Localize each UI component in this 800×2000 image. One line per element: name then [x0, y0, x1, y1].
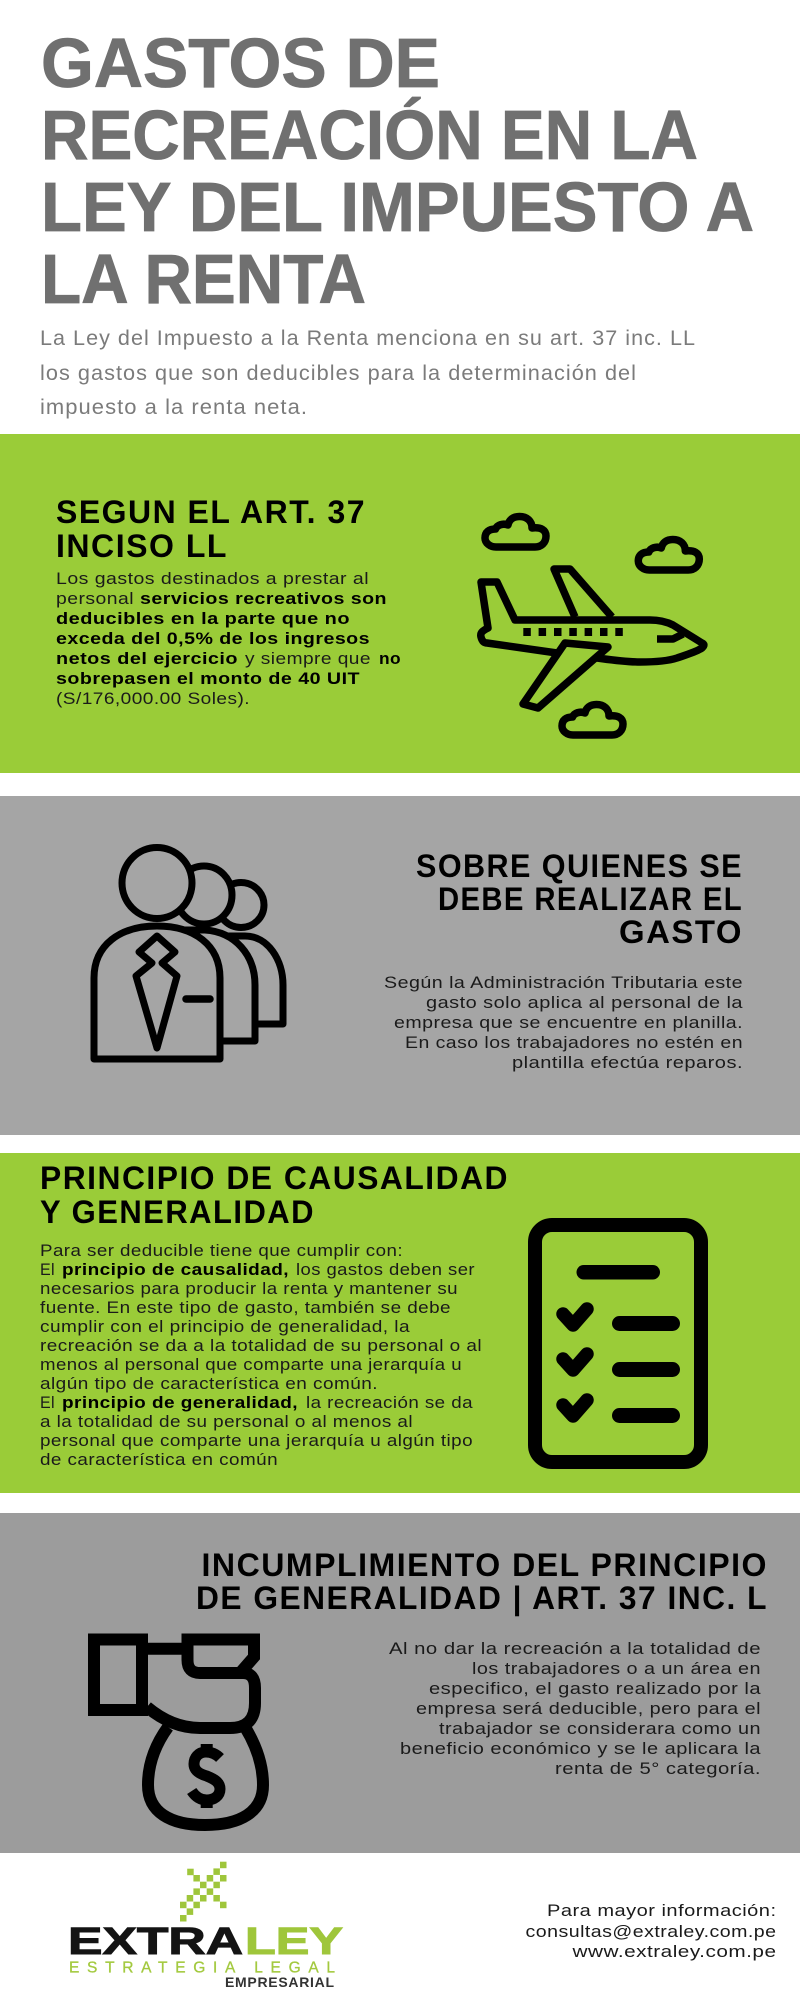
icon: three people in suits	[94, 848, 283, 1059]
title: RECREACIÓN EN LA	[41, 96, 698, 174]
logo mark: pixel X	[180, 1862, 226, 1922]
heading: segun el art. 37: INCISO LL	[56, 528, 228, 564]
heading: segun el art. 37: SEGUN EL ART. 37	[56, 494, 366, 530]
body text: incumplimiento	[389, 1639, 761, 1778]
body text: principio de causalidad: personal que comparte una jerarquía u algún tipo	[40, 1431, 473, 1450]
icon: airplane and clouds	[481, 516, 704, 735]
panel: principio de causalidad	[0, 1153, 800, 1493]
heading: principio de causalidad: Y GENERALIDAD	[40, 1194, 315, 1230]
body text: segun el art. 37	[56, 569, 401, 708]
body text: principio de causalidad: de característica en común	[40, 1450, 278, 1469]
heading: incumplimiento: DE GENERALIDAD | ART. 37 INC. L	[196, 1580, 768, 1616]
intro text: los gastos que son deducibles para la determinación del	[40, 362, 637, 385]
body text: segun el art. 37: (S/176,000.00 Soles).	[56, 689, 250, 708]
heading: sobre quienes: SOBRE QUIENES SE	[416, 848, 743, 884]
heading: segun el art. 37	[56, 494, 366, 564]
body text: segun el art. 37: personal	[56, 589, 134, 608]
body text: segun el art. 37: y siempre que	[245, 649, 371, 668]
heading: sobre quienes: GASTO	[619, 914, 743, 950]
intro text: La Ley del Impuesto a la Renta menciona en su art. 37 inc. LL	[40, 327, 696, 350]
body text: segun el art. 37: deducibles en la parte que no	[56, 609, 350, 628]
body text: principio de causalidad: Para ser deducible tiene que cumplir con:	[40, 1241, 403, 1260]
body text: segun el art. 37: netos del ejercicio	[56, 649, 238, 668]
title: LA RENTA	[41, 240, 366, 318]
body text: principio de causalidad: a la totalidad de su personal o al menos al	[40, 1412, 413, 1431]
body text: principio de causalidad: la recreación se da	[306, 1393, 473, 1412]
contact text: www.extraley.com.pe	[571, 1942, 776, 1961]
intro text: impuesto a la renta neta.	[40, 396, 308, 419]
title: GASTOS DE	[41, 24, 440, 102]
title	[41, 24, 754, 318]
contact text: consultas@extraley.com.pe	[526, 1922, 776, 1941]
body text: segun el art. 37: no	[379, 649, 401, 668]
title: LEY DEL IMPUESTO A	[41, 168, 754, 246]
intro text	[40, 327, 696, 419]
body text: incumplimiento: trabajador se considerara como un	[439, 1719, 761, 1738]
heading: sobre quienes	[416, 848, 743, 950]
icon: hand holding money bag	[94, 1640, 263, 1825]
body text: segun el art. 37: sobrepasen el monto de 40 UIT	[56, 669, 360, 688]
body text: principio de causalidad: principio de causalidad,	[62, 1260, 289, 1279]
heading: sobre quienes: DEBE REALIZAR EL	[438, 881, 743, 917]
body text: segun el art. 37: exceda del 0,5% de los ingresos	[56, 629, 370, 648]
body text: principio de causalidad: los gastos deben ser	[296, 1260, 475, 1279]
body text: principio de causalidad: fuente. En este tipo de gasto, también se debe	[40, 1298, 451, 1317]
logo: extraley: EXTRA	[68, 1921, 243, 1963]
body text: principio de causalidad: menos al personal que comparte una jerarquía u	[40, 1355, 462, 1374]
body text: segun el art. 37: Los gastos destinados a prestar al	[56, 569, 369, 588]
body text: segun el art. 37: servicios recreativos son	[140, 589, 387, 608]
body text: principio de causalidad: El	[40, 1393, 55, 1412]
panel: sobre quienes	[0, 796, 800, 1135]
body text: principio de causalidad: necesarios para producir la renta y mantener su	[40, 1279, 458, 1298]
contact text: Para mayor información:	[547, 1901, 776, 1920]
body text: principio de causalidad	[40, 1241, 482, 1469]
body text: sobre quienes: Según la Administración Tributaria este	[384, 973, 743, 992]
body text: sobre quienes	[384, 973, 743, 1072]
panel: segun el art. 37	[0, 434, 800, 773]
body text: incumplimiento: los trabajadores o a un área en	[472, 1659, 761, 1678]
heading: incumplimiento: INCUMPLIMIENTO DEL PRINCIPIO	[202, 1547, 768, 1583]
body text: incumplimiento: Al no dar la recreación a la totalidad de	[389, 1639, 761, 1658]
heading: principio de causalidad: PRINCIPIO DE CAUSALIDAD	[40, 1160, 509, 1196]
body text: incumplimiento: empresa será deducible, pero para el	[416, 1699, 761, 1718]
body text: sobre quienes: plantilla efectúa reparos.	[512, 1053, 743, 1072]
body text: incumplimiento: renta de 5° categoría.	[555, 1759, 761, 1778]
logo: extraley: EMPRESARIAL	[225, 1974, 334, 1990]
logo: extraley: ESTRATEGIA LEGAL	[69, 1960, 335, 1976]
body text: sobre quienes: En caso los trabajadores no estén en	[405, 1033, 743, 1052]
body text: incumplimiento: especifico, el gasto realizado por la	[429, 1679, 761, 1698]
panel: incumplimiento	[0, 1513, 800, 1853]
body text: principio de causalidad: cumplir con el principio de generalidad, la	[40, 1317, 410, 1336]
heading: principio de causalidad	[40, 1160, 509, 1230]
body text: principio de causalidad: recreación se da a la totalidad de su personal o al	[40, 1336, 482, 1355]
body text: principio de causalidad: principio de generalidad,	[62, 1393, 298, 1412]
body text: principio de causalidad: El	[40, 1260, 55, 1279]
body text: principio de causalidad: algún tipo de característica en común.	[40, 1374, 378, 1393]
heading: incumplimiento	[196, 1547, 768, 1616]
contact text	[526, 1901, 776, 1961]
logo: extraley	[68, 1862, 343, 1990]
body text: incumplimiento: beneficio económico y se le aplicara la	[400, 1739, 761, 1758]
icon: checklist	[535, 1225, 701, 1462]
body text: sobre quienes: empresa que se encuentre en planilla.	[394, 1013, 743, 1032]
logo: extraley: LEY	[245, 1921, 343, 1963]
body text: sobre quienes: gasto solo aplica al personal de la	[426, 993, 743, 1012]
